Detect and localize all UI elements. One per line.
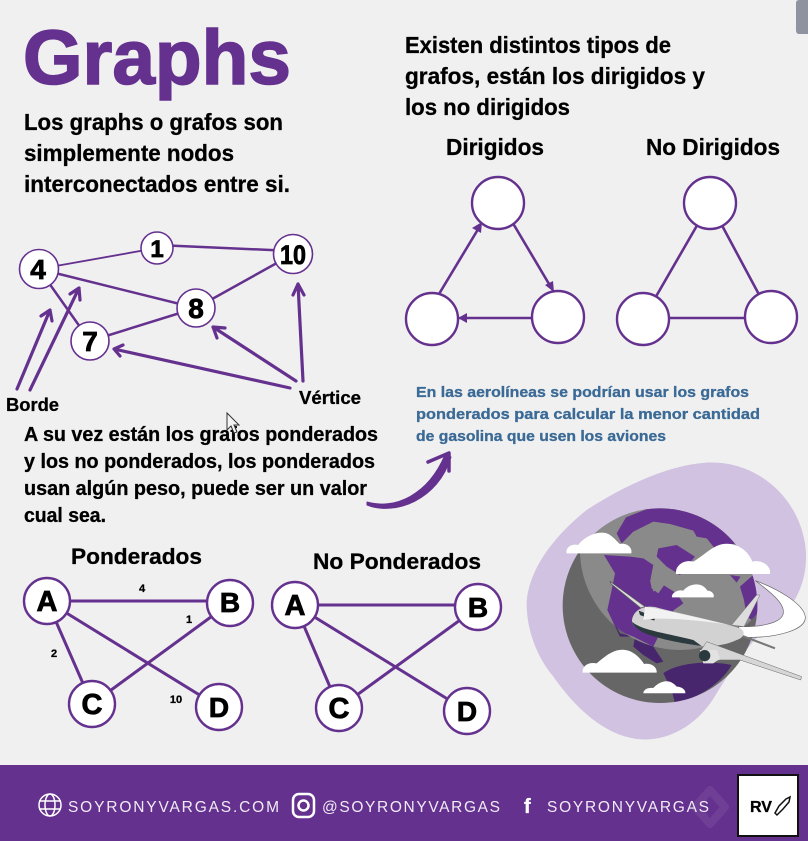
title: Graphs [23, 15, 291, 101]
chart: weighted graph: 10 [170, 694, 182, 706]
text block: definition: simplemente nodos [24, 140, 234, 166]
chart: weighted graph [24, 578, 253, 730]
chart: example graph with vertices and edges: 1 [150, 236, 164, 263]
text block: graph types [405, 32, 705, 120]
chart: example graph with vertices and edges: 7 [82, 326, 98, 357]
label: vertice: Vértice [299, 388, 361, 408]
chart: undirected graph [617, 177, 797, 345]
footer instagram: @SOYRONYVARGAS [322, 799, 500, 816]
chart: weighted graph: 4 [139, 583, 146, 595]
callout: airlines: ponderados para calcular la menor cantidad [416, 407, 760, 423]
text block: weighted graphs: cual sea. [24, 505, 106, 527]
callout: airlines: de gasolina que usen los aviones [416, 429, 666, 445]
text block: weighted graphs: y los no ponderados, los ponderados [24, 451, 375, 473]
text block: definition [24, 109, 290, 197]
label: borde: Borde [6, 395, 59, 415]
text block: weighted graphs: usan algún peso, puede ser un valor [24, 478, 367, 500]
chart: weighted graph: 2 [51, 648, 57, 660]
chart: weighted graph: C [82, 689, 103, 721]
chart: example graph with vertices and edges [20, 232, 312, 360]
chart: weighted graph: A [37, 586, 58, 618]
heading: dirigidos: Dirigidos [446, 134, 544, 160]
text block: graph types: Existen distintos tipos de [405, 32, 671, 58]
engine [700, 650, 720, 663]
text block: definition: Los graphs o grafos son [24, 109, 283, 135]
heading: ponderados: Ponderados [71, 544, 202, 569]
near wing [700, 642, 802, 680]
text block: definition: interconectados entre si. [24, 171, 290, 197]
illustration: globe and airplane [527, 463, 806, 740]
chart: example graph with vertices and edges: 4 [30, 254, 46, 285]
arrows: vertice [114, 284, 304, 388]
globe [560, 507, 760, 707]
heading: no ponderados: No Ponderados [313, 549, 481, 574]
footer facebook: SOYRONYVARGAS [547, 799, 709, 816]
text block: weighted graphs [24, 424, 378, 527]
arrows: borde [17, 288, 80, 390]
chart: directed graph [406, 177, 584, 345]
chart: weighted graph: B [220, 587, 240, 618]
browser scrollbar tab [796, 0, 808, 34]
clouds [566, 533, 770, 693]
text block: graph types: grafos, están los dirigidos y [405, 63, 705, 89]
icon: rocket [775, 797, 790, 815]
footer website: SOYRONYVARGAS.COM [68, 799, 279, 816]
chart: unweighted graph: D [457, 696, 477, 727]
heading: no dirigidos: No Dirigidos [646, 134, 780, 160]
icon: globe [39, 794, 61, 816]
chart: example graph with vertices and edges: 8 [188, 293, 204, 324]
fin [732, 595, 760, 627]
far wing [610, 581, 645, 608]
watermark [695, 790, 725, 824]
footer band [0, 765, 808, 841]
text block: weighted graphs: A su vez están los grafos ponderados [24, 424, 378, 446]
chart: unweighted graph [272, 582, 501, 734]
logo box [738, 775, 798, 836]
icon: cursor [227, 413, 239, 433]
chart: example graph with vertices and edges: 10 [280, 240, 306, 270]
chart: unweighted graph: C [329, 693, 350, 725]
arrow: curved pointer [367, 453, 451, 508]
callout: airlines: En las aerolíneas se podrían usar los grafos [416, 385, 749, 401]
chart: unweighted graph: A [285, 590, 306, 622]
chart: unweighted graph: B [468, 592, 488, 623]
blob background [527, 463, 806, 740]
airplane tail swoosh [738, 581, 805, 637]
icon: facebook: f [524, 796, 531, 818]
icon: instagram [293, 794, 314, 817]
chart: weighted graph: 1 [186, 614, 192, 626]
logo box: RV [750, 799, 773, 816]
fuselage [632, 607, 744, 646]
text block: graph types: los no dirigidos [405, 94, 570, 120]
chart: weighted graph: D [209, 692, 229, 723]
callout: airlines [416, 385, 760, 445]
